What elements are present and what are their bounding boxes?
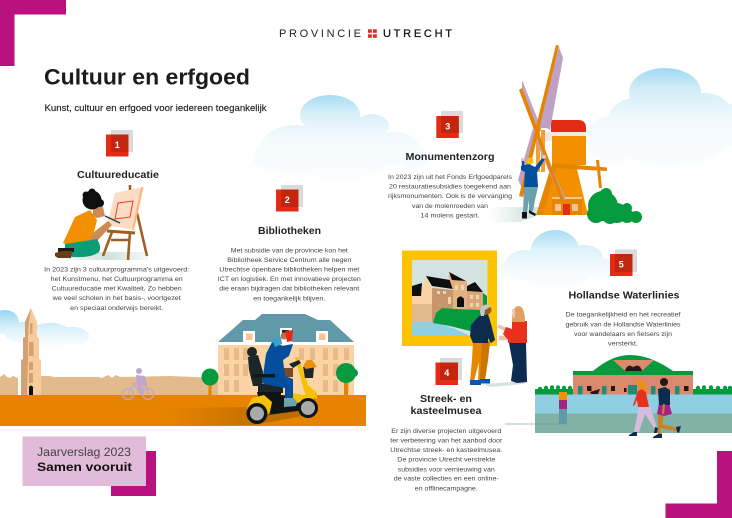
cloud: bottom left [0,310,89,347]
bicycle rider [122,368,154,400]
visitors [470,304,527,387]
text: Hollandse Waterlinies: versterkt. [608,341,638,348]
museum painting [402,250,497,346]
text: Hollandse Waterlinies: De toegankelijkheid en het recreatief [566,312,681,319]
heading: Streek- en kasteelmusea [410,393,482,417]
heading: Bibliotheken: Bibliotheken [258,225,321,237]
walker: red top [629,380,658,436]
badge 2: 2 [285,195,290,205]
annual report tag: Jaarverslag 2023 [37,447,131,459]
cloud: top centre [253,95,429,180]
text: Streek- en kasteelmusea: De provincie Utrecht verstrekte [397,457,496,464]
text: Bibliotheken: die eraan bijdragen dat bibliotheken relevant [219,286,359,293]
tower: Dom [21,308,41,395]
text: Cultuureducatie: het Kunstmenu, het Cultuurprogramma en [51,276,183,283]
heading: Streek- en kasteelmusea: Streek- en [420,393,472,405]
fort and water scene [505,355,732,433]
text: Streek- en kasteelmusea: subsidies voor vernieuwing van [398,466,495,473]
text: Monumentenzorg: 14 molens gestart. [420,212,480,219]
logo: Provincie Utrecht: UTRECHT [383,28,452,40]
text: Bibliotheken: Utrechtse openbare bibliotheken helpen met [219,266,359,274]
badge 3: 3 [445,122,450,132]
text: Bibliotheken: Met subsidie van de provincie kon het [231,247,348,254]
woman [498,306,527,383]
annual report tag [22,436,156,496]
text: Cultuureducatie: Cultuureducatie met Kwaliteit. Zo hebben [52,286,182,293]
badge 2 [276,185,303,212]
text: Bibliotheken: ICT en logistiek. En met innovatieve projecten [218,276,361,283]
text: Streek- en kasteelmusea: ter verbetering van het aanbod door [390,438,503,445]
text: Streek- en kasteelmusea: Er zijn diverse projecten uitgevoerd [391,428,502,435]
badge 1: 1 [115,140,120,150]
logo: Provincie Utrecht: PROVINCIE [279,28,361,40]
ground: orange road [0,395,366,426]
text: Monumentenzorg: rijksmonumenten. Ook is de vervanging [388,193,512,200]
badge 3 [436,111,463,138]
text: Hollandse Waterlinies: gebruik van de Hollandse Waterlinies [566,321,681,328]
corner: bottom-right magenta [666,451,732,518]
corner: top-left magenta [0,0,66,66]
text: Bibliotheken: Bibliotheek Service Centrum alle negen [227,257,352,264]
badge 1 [106,130,133,156]
tree right [336,363,358,395]
library building [218,314,354,395]
heading: Monumentenzorg: Monumentenzorg [406,151,494,163]
heading: Streek- en kasteelmusea: kasteelmusea [410,405,482,417]
text: Streek- en kasteelmusea: Utrechtse streek- en kasteelmusea. [390,447,502,454]
cloud: top right [586,68,732,167]
text: Monumentenzorg: van de molenroeden van [412,203,488,210]
badge 5: 5 [619,260,624,270]
heading: Cultuureducatie: Cultuureducatie [77,169,159,181]
skyline [0,374,218,395]
text: Cultuureducatie: we veel scholen in het basis-, voortgezet [52,295,181,302]
badge 4 [436,358,462,385]
text: Monumentenzorg: In 2023 zijn uit het Fonds Erfgoedparels [388,174,513,181]
cloud: middle right [498,230,614,289]
badge 4: 4 [444,368,449,378]
text: Cultuureducatie: In 2023 zijn 3 cultuurprogramma's uitgevoerd: [44,266,189,274]
windmill [490,45,642,224]
text: Monumentenzorg [388,174,513,219]
tree left [202,368,218,395]
text: Cultuureducatie: en speciaal onderwijs bereikt. [70,305,163,312]
text: Cultuureducatie [44,266,189,312]
illustration: painter at easel [50,185,148,260]
text: Hollandse Waterlinies: voor wandelaars en fietsers zijn [574,331,672,338]
subtitle: Kunst, cultuur en erfgoed voor iedereen toegankelijk [44,103,267,113]
text: Streek- en kasteelmusea [390,428,503,492]
heading: Hollandse Waterlinies: Hollandse Waterlinies [568,290,680,302]
text: Streek- en kasteelmusea: de vaste collecties en een online- [394,476,499,483]
title: Cultuur en erfgoed [44,64,250,90]
text: Bibliotheken [218,247,361,302]
man [470,304,495,385]
scooter rider [165,330,318,426]
annual report tag: Samen vooruit [37,462,132,474]
text: Streek- en kasteelmusea: en offlinecampagne. [415,485,478,492]
badge 5 [610,250,637,276]
walker: magenta skirt [653,378,681,438]
walkers [629,378,681,438]
text: Bibliotheken: en toegankelijk blijven. [253,295,325,302]
text: Hollandse Waterlinies [566,312,681,348]
logo: Provincie Utrecht [279,28,452,40]
text: Monumentenzorg: 20 restauratiesubsidies toegekend aan [389,184,511,190]
worker [521,155,546,218]
